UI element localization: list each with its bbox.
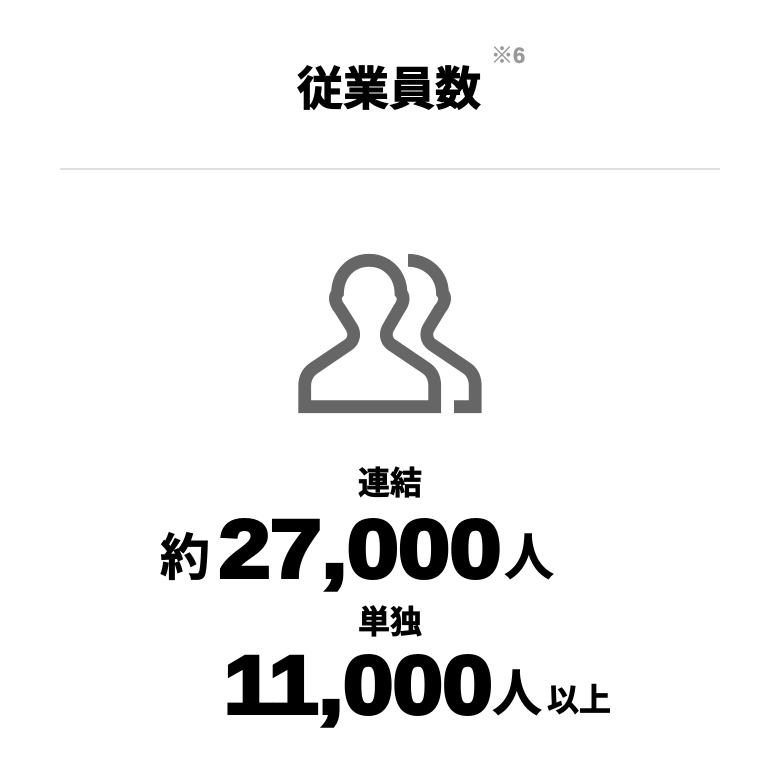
number: 11,000 [224,640,492,731]
unit: 人 [504,518,554,590]
unit: 人 [492,654,542,726]
prefix: 約 [160,518,210,590]
non-consolidated figure [224,640,611,731]
footnote marker: ※6 [491,43,525,68]
label: consolidated: 連結 [358,458,422,504]
suffix: 以上 [547,675,611,721]
icon: two people [298,254,482,414]
label: non-consolidated: 単独 [358,597,422,643]
number: 27,000 [219,504,501,595]
title: 従業員数 [297,53,481,119]
consolidated figure [160,504,554,595]
